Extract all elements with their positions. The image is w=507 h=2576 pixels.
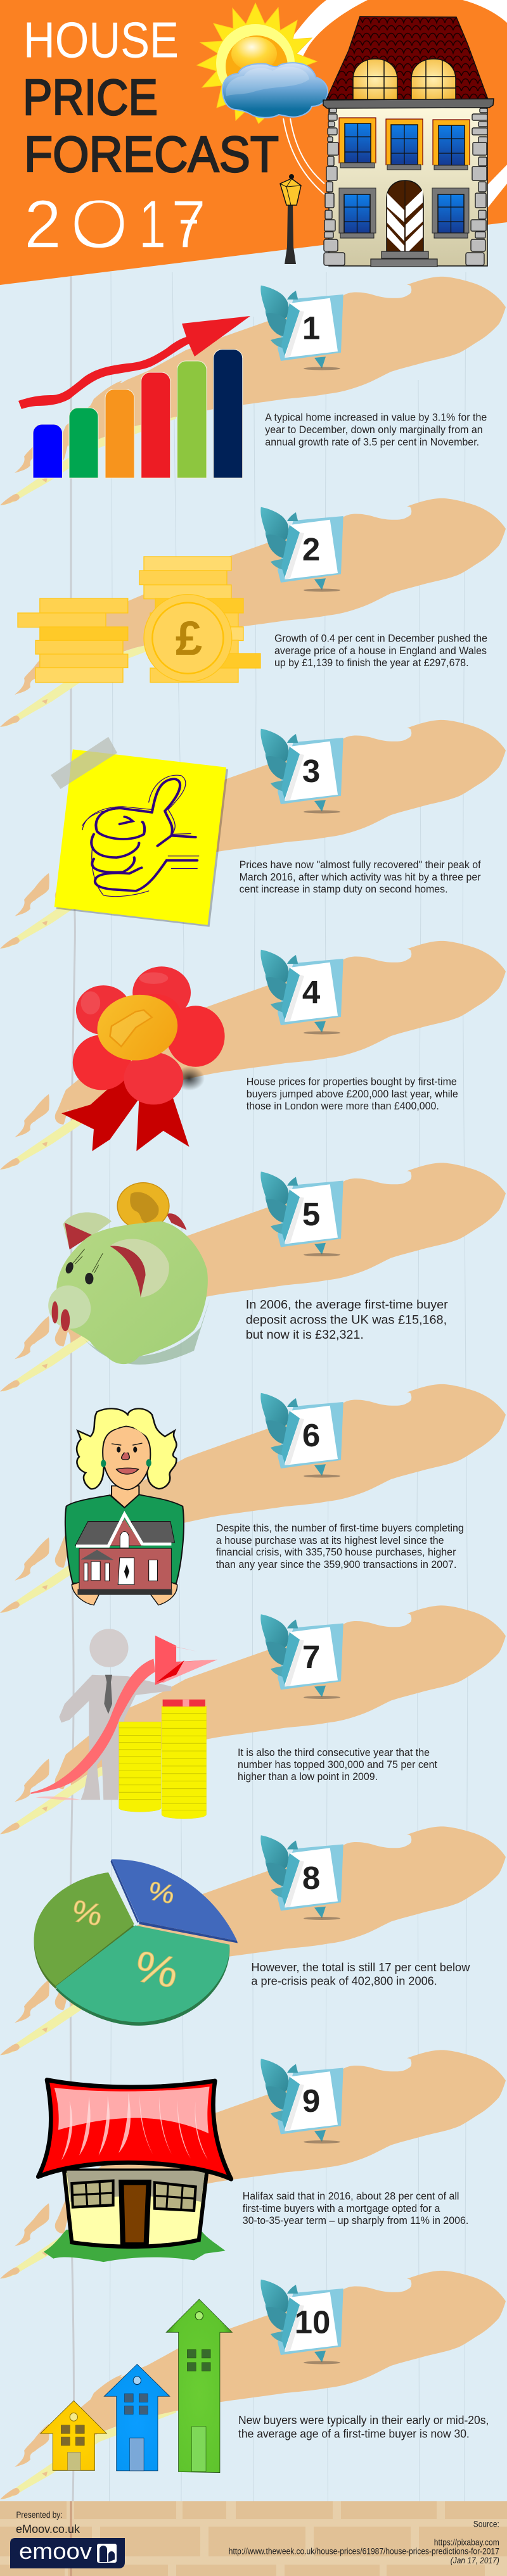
numbered tag 5 xyxy=(260,1171,343,1256)
cornice xyxy=(323,99,494,108)
source xyxy=(229,2520,499,2565)
numbered tag 8: 8 xyxy=(302,1860,320,1896)
numbered tag 9: 9 xyxy=(302,2083,320,2119)
icon: pound coin stacks xyxy=(18,557,260,683)
text block: but now it is £32,321. xyxy=(246,1328,364,1342)
logo: emoov xyxy=(10,2538,125,2568)
text block xyxy=(246,1298,448,1342)
lower windows xyxy=(339,188,469,238)
brush stroke xyxy=(0,1384,506,1613)
text block xyxy=(274,633,487,669)
text block: New buyers were typically in their early or mid-20s, xyxy=(238,2414,489,2427)
numbered tag 1: 1 xyxy=(302,310,320,346)
text block xyxy=(247,1076,458,1112)
panel: item 7 xyxy=(0,1605,506,1834)
icon: woman holding house xyxy=(65,1408,184,1605)
numbered tag 5: 5 xyxy=(302,1196,320,1232)
text block xyxy=(243,2191,468,2226)
brush stroke xyxy=(0,277,506,505)
panel: item 3 xyxy=(0,720,506,949)
stone columns xyxy=(324,108,487,265)
header orange banner xyxy=(0,0,507,285)
title xyxy=(23,12,279,262)
text block: year to December, down only marginally from an xyxy=(265,424,483,436)
text block: cent increase in stamp duty on second homes. xyxy=(240,883,448,895)
icon: green piggy bank with coin xyxy=(43,1183,210,1365)
brush stroke xyxy=(0,2050,506,2278)
panel: item 8 xyxy=(0,1826,506,2055)
text block: first-time buyers with a mortgage opted for a xyxy=(243,2203,440,2214)
source: Source: xyxy=(473,2520,499,2529)
title: PRICE xyxy=(23,69,158,125)
slice: exploded blue: % xyxy=(146,1876,177,1910)
slice: exploded blue xyxy=(110,1859,238,1943)
brush stroke xyxy=(0,2271,506,2499)
brush stroke xyxy=(0,1826,506,2055)
icon: red rosette medal xyxy=(61,966,225,1151)
icon: townhouse xyxy=(323,16,494,267)
slice: main teal xyxy=(56,1926,229,2026)
text block: A typical home increased in value by 3.1% for the xyxy=(265,412,487,423)
brush stroke xyxy=(0,498,506,727)
text block: a house purchase was at its highest level since the xyxy=(216,1535,444,1546)
text block: higher than a low point in 2009. xyxy=(238,1771,378,1783)
numbered tag 10 xyxy=(260,2280,343,2364)
text block: annual growth rate of 3.5 per cent in November. xyxy=(265,436,479,448)
icon: cloud xyxy=(222,63,328,118)
title: 2 xyxy=(24,186,61,262)
numbered tag 7: 7 xyxy=(302,1639,320,1675)
footer xyxy=(0,2501,507,2576)
panel: item 4 xyxy=(0,941,506,1170)
text block: Prices have now "almost fully recovered" their peak of xyxy=(240,859,481,871)
text block: up by £1,139 to finish the year at £297,678. xyxy=(274,657,469,669)
text block xyxy=(251,1961,470,1988)
numbered tag 1 xyxy=(260,286,343,370)
numbered tag 6 xyxy=(260,1393,343,1478)
text block: 30-to-35-year term – up sharply from 11% in 2006. xyxy=(243,2215,468,2226)
panel: item 1 xyxy=(0,277,506,505)
text block xyxy=(238,1747,437,1783)
brush stroke xyxy=(0,1605,506,1834)
slice: left green: % xyxy=(68,1893,106,1933)
arrow: growth xyxy=(18,316,250,409)
upper windows xyxy=(339,118,470,170)
numbered tag 6: 6 xyxy=(302,1417,320,1453)
door xyxy=(387,180,423,251)
text block: It is also the third consecutive year that the xyxy=(238,1747,430,1758)
icon: rising bar chart xyxy=(33,350,243,478)
text block: buyers jumped above £200,000 last year, while xyxy=(247,1089,458,1100)
numbered tag 2: 2 xyxy=(302,531,320,567)
panel: item 10 xyxy=(0,2271,506,2499)
numbered tag 7 xyxy=(260,1614,343,1699)
green house xyxy=(166,2299,232,2473)
dormer windows xyxy=(353,59,456,99)
text block: those in London were more than £400,000. xyxy=(247,1101,439,1112)
slice: main teal: % xyxy=(130,1942,183,1997)
text block: Despite this, the number of first-time buyers completing xyxy=(216,1523,464,1534)
text block: average price of a house in England and Wales xyxy=(274,645,487,657)
text block xyxy=(240,859,481,895)
panel: item 2 xyxy=(0,498,506,727)
icon: red roof cottage xyxy=(38,2080,231,2262)
title: 7 xyxy=(171,186,206,262)
numbered tag 3 xyxy=(260,729,343,813)
text block: However, the total is still 17 per cent below xyxy=(251,1961,470,1974)
numbered tag 4 xyxy=(260,950,343,1035)
title: HOUSE xyxy=(23,12,179,68)
numbered tag 4: 4 xyxy=(302,974,321,1010)
logo: emoov: emoov xyxy=(19,2538,92,2564)
presented by xyxy=(16,2510,80,2535)
numbered tag 8 xyxy=(260,1835,343,1920)
presented by: eMoov.co.uk xyxy=(16,2522,80,2535)
brush stroke xyxy=(0,1163,506,1392)
panel: item 6 xyxy=(0,1384,506,1613)
text block: financial crisis, with 335,750 house purchases, higher xyxy=(216,1547,456,1558)
house wall xyxy=(329,106,487,266)
title: 0 xyxy=(70,186,129,262)
icon: businessman with arrow and coins xyxy=(30,1629,217,1819)
icon: pound coin stacks: £ xyxy=(176,612,202,666)
source: (Jan 17, 2017) xyxy=(451,2556,499,2565)
panel: item 9 xyxy=(0,2050,506,2278)
text block xyxy=(238,2414,489,2440)
numbered tag 3: 3 xyxy=(302,753,320,789)
text block: Growth of 0.4 per cent in December pushed the xyxy=(274,633,487,645)
icon: sticky note with thumbs up xyxy=(51,737,228,927)
numbered tag 9 xyxy=(260,2059,343,2144)
numbered tag 10: 10 xyxy=(295,2304,330,2340)
title: FORECAST xyxy=(24,126,279,182)
numbered tag 2 xyxy=(260,507,343,591)
presented by: Presented by: xyxy=(16,2510,62,2520)
text block: than any year since the 359,900 transactions in 2007. xyxy=(216,1559,456,1570)
icon: sun xyxy=(197,3,317,123)
text block: the average age of a first-time buyer is now 30. xyxy=(238,2428,470,2440)
brush stroke xyxy=(0,720,506,949)
roof with tiles xyxy=(326,16,488,99)
slice: left green xyxy=(34,1872,134,1989)
blue house xyxy=(104,2364,170,2471)
brick band xyxy=(0,2501,507,2576)
text block: a pre-crisis peak of 402,800 in 2006. xyxy=(251,1975,437,1988)
brush stroke xyxy=(0,941,506,1170)
text block xyxy=(265,412,487,448)
text block: number has topped 300,000 and 75 per cent xyxy=(238,1759,437,1771)
text block: deposit across the UK was £15,168, xyxy=(246,1313,447,1327)
icon: three arrow houses xyxy=(41,2299,232,2473)
title: 1 xyxy=(139,186,166,262)
text block xyxy=(216,1523,464,1570)
text block: March 2016, after which activity was hit by a three per xyxy=(240,871,481,883)
pie chart xyxy=(34,1859,238,2026)
panel: item 5 xyxy=(0,1163,506,1392)
text block: In 2006, the average first-time buyer xyxy=(246,1298,448,1312)
front steps xyxy=(371,251,437,267)
yellow house xyxy=(41,2401,106,2470)
text block: Halifax said that in 2016, about 28 per cent of all xyxy=(243,2191,459,2202)
source: https://pixabay.com xyxy=(434,2537,499,2547)
text block: House prices for properties bought by first-time xyxy=(247,1076,457,1088)
icon: street lamp xyxy=(280,174,301,264)
